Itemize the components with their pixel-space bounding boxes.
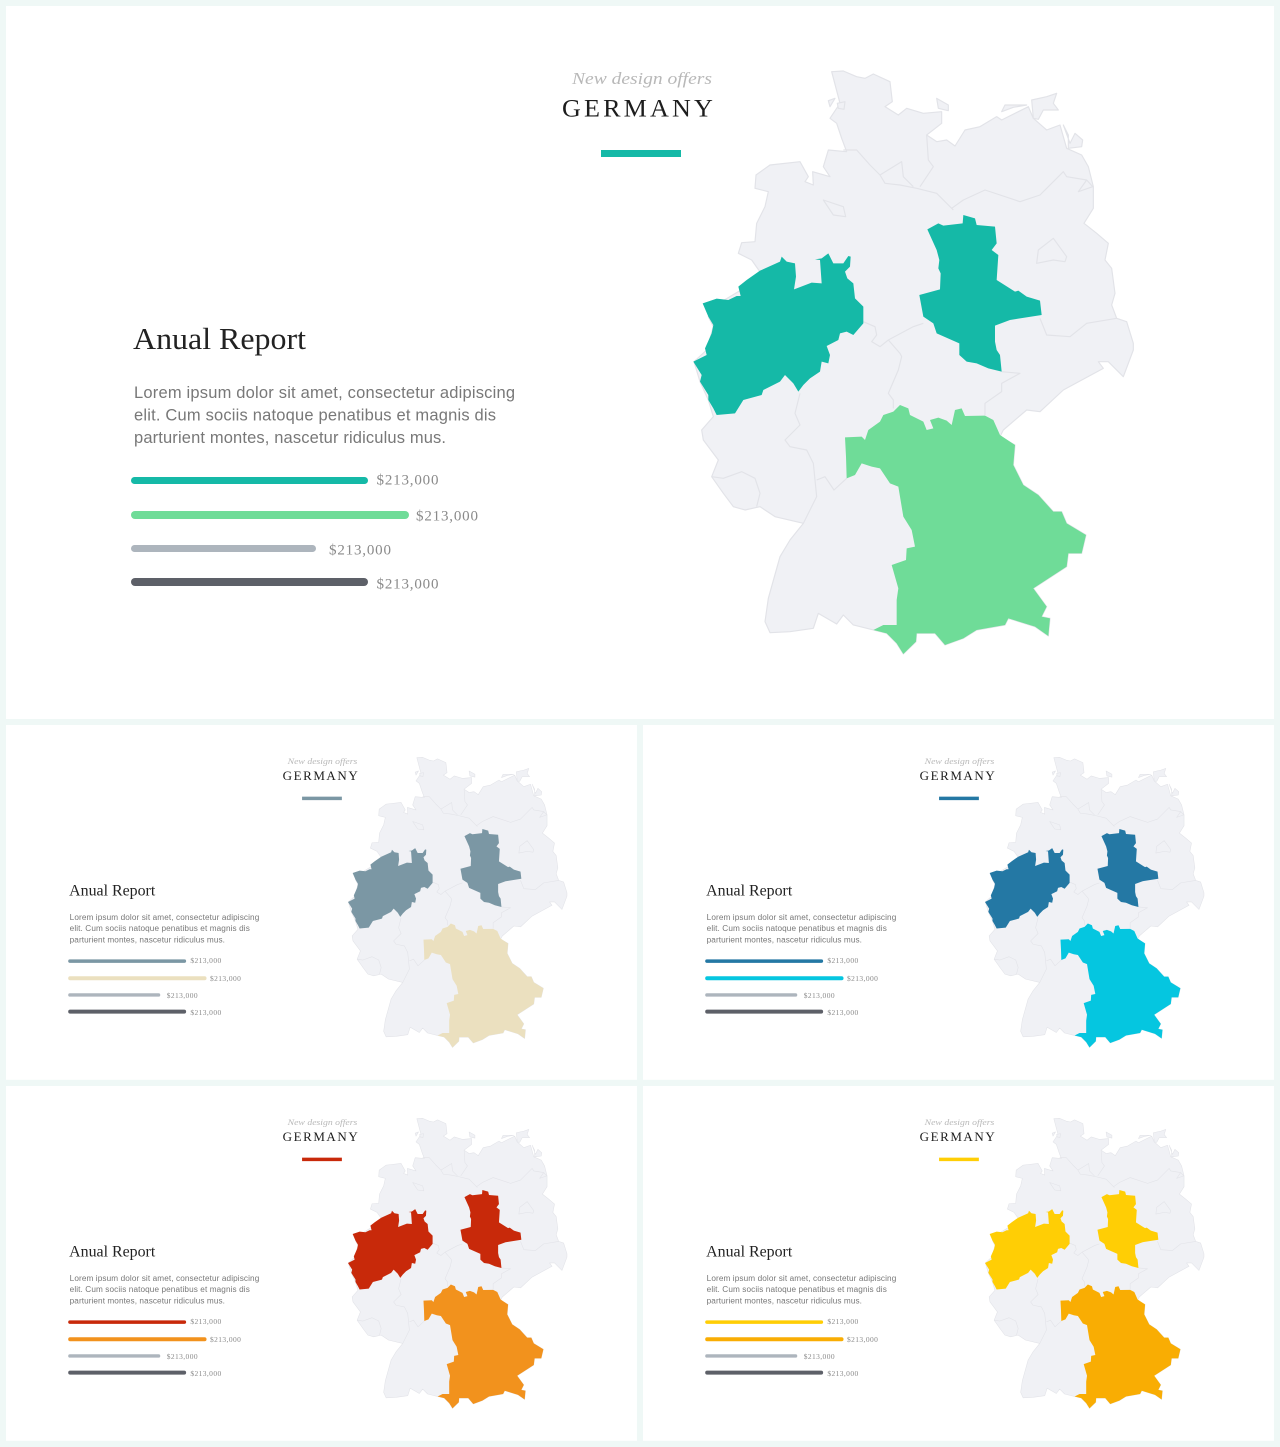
title: GERMANY	[283, 1130, 359, 1144]
body text: Lorem ipsum dolor sit amet, consectetur adipiscing	[70, 1274, 260, 1283]
title: GERMANY	[920, 769, 996, 783]
body text: parturient montes, nascetur ridiculus mus.	[707, 1296, 862, 1305]
body text	[707, 913, 897, 944]
heading: Anual Report	[69, 883, 156, 900]
map of Germany	[348, 1118, 567, 1408]
panel: blue and cyan variant	[643, 725, 1274, 1080]
map of Germany	[348, 757, 567, 1047]
body text: Lorem ipsum dolor sit amet, consectetur adipiscing	[134, 384, 515, 402]
bar chart	[705, 1317, 878, 1378]
body text: elit. Cum sociis natoque penatibus et magnis dis	[707, 1285, 887, 1294]
body text	[70, 1274, 260, 1305]
subtitle: New design offers	[286, 756, 358, 766]
title: GERMANY	[283, 769, 359, 783]
bar chart: $213,000	[210, 1335, 241, 1344]
bar chart: $213,000	[190, 1008, 221, 1017]
title accent bar	[302, 1158, 342, 1161]
panel: main slide teal	[6, 6, 1274, 719]
body text: Lorem ipsum dolor sit amet, consectetur adipiscing	[707, 913, 897, 922]
bar chart	[705, 956, 878, 1017]
body text: parturient montes, nascetur ridiculus mus.	[70, 935, 225, 944]
title accent bar	[601, 150, 681, 157]
title accent bar	[939, 1158, 979, 1161]
body text	[70, 913, 260, 944]
body text	[134, 384, 515, 447]
panel: red and orange variant	[6, 1086, 637, 1441]
body text: parturient montes, nascetur ridiculus mus.	[70, 1296, 225, 1305]
bar chart: $213,000	[167, 1352, 198, 1361]
bar chart: $213,000	[804, 991, 835, 1000]
bar chart: $213,000	[210, 974, 241, 983]
body text: parturient montes, nascetur ridiculus mus.	[707, 935, 862, 944]
subtitle: New design offers	[286, 1117, 358, 1127]
heading: Anual Report	[69, 1244, 156, 1261]
body text: parturient montes, nascetur ridiculus mus.	[134, 429, 446, 447]
bar chart: $213,000	[827, 1008, 858, 1017]
bar chart: $213,000	[376, 472, 438, 488]
subtitle: New design offers	[923, 756, 995, 766]
body text: elit. Cum sociis natoque penatibus et magnis dis	[707, 924, 887, 933]
bar chart: $213,000	[847, 974, 878, 983]
map of Germany	[985, 757, 1204, 1047]
bar chart: $213,000	[190, 1369, 221, 1378]
body text: elit. Cum sociis natoque penatibus et magnis dis	[70, 1285, 250, 1294]
title accent bar	[939, 797, 979, 800]
panel: slate and sand variant	[6, 725, 637, 1080]
body text	[707, 1274, 897, 1305]
panel: yellow and amber variant	[643, 1086, 1274, 1441]
title accent bar	[302, 797, 342, 800]
bar chart: $213,000	[167, 991, 198, 1000]
body text: Lorem ipsum dolor sit amet, consectetur adipiscing	[707, 1274, 897, 1283]
bar chart	[68, 956, 241, 1017]
title: GERMANY	[920, 1130, 996, 1144]
bar chart	[131, 472, 478, 592]
heading: Anual Report	[706, 883, 793, 900]
body text: elit. Cum sociis natoque penatibus et magnis dis	[70, 924, 250, 933]
subtitle: New design offers	[571, 69, 712, 88]
bar chart: $213,000	[804, 1352, 835, 1361]
body text: Lorem ipsum dolor sit amet, consectetur adipiscing	[70, 913, 260, 922]
bar chart: $213,000	[376, 576, 438, 592]
subtitle: New design offers	[923, 1117, 995, 1127]
bar chart: $213,000	[827, 1317, 858, 1326]
bar chart: $213,000	[847, 1335, 878, 1344]
heading: Anual Report	[133, 321, 306, 356]
body text: elit. Cum sociis natoque penatibus et magnis dis	[134, 406, 496, 424]
map of Germany	[985, 1118, 1204, 1408]
heading: Anual Report	[706, 1244, 793, 1261]
bar chart: $213,000	[827, 1369, 858, 1378]
map of Germany	[693, 71, 1133, 654]
bar chart: $213,000	[190, 956, 221, 965]
bar chart: $213,000	[827, 956, 858, 965]
bar chart: $213,000	[416, 508, 478, 524]
bar chart	[68, 1317, 241, 1378]
title: GERMANY	[562, 96, 716, 122]
bar chart: $213,000	[329, 542, 391, 558]
bar chart: $213,000	[190, 1317, 221, 1326]
